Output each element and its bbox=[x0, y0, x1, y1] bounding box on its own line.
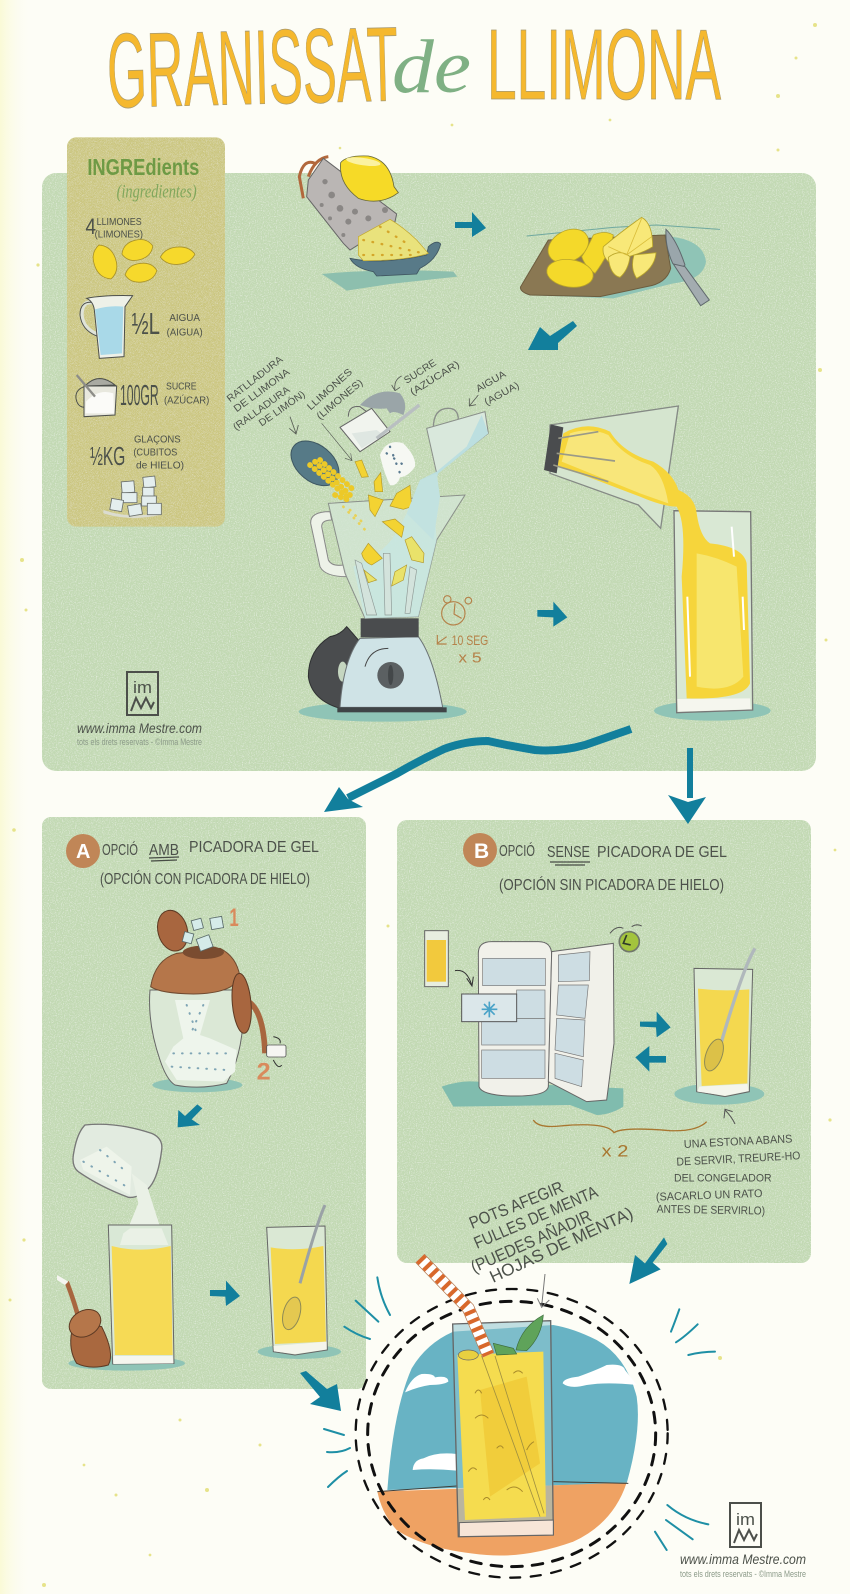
ingredient: water label: (AIGUA) bbox=[167, 328, 203, 339]
blender labels: DE LIMÓN) bbox=[256, 388, 308, 429]
ingredient: water label: ½L bbox=[132, 307, 160, 341]
note: take out before serving bbox=[656, 1133, 801, 1218]
ingredient: ice label: GLAÇONS bbox=[134, 435, 181, 446]
blender labels: (AZÚCAR) bbox=[407, 358, 462, 398]
ingredients heading bbox=[87, 154, 199, 203]
title: GRANISSAT bbox=[106, 5, 399, 130]
option B heading: (OPCIÓN SIN PICADORA DE HIELO) bbox=[499, 875, 724, 894]
arrow: option B to final drink bbox=[629, 1237, 667, 1284]
label pointer arrows bbox=[289, 376, 478, 461]
ingredient: water label bbox=[132, 307, 203, 341]
icon: four lemons bbox=[89, 236, 196, 284]
ice crusher bbox=[150, 907, 286, 1087]
arrows: in and out of freezer bbox=[635, 1012, 671, 1072]
final drink scene bbox=[324, 1237, 715, 1578]
icon: snowflake bbox=[482, 1002, 497, 1017]
glass with spoon bbox=[674, 948, 764, 1105]
blender labels: (AGUA) bbox=[483, 380, 521, 408]
note: add mint leaves: (PUEDES AÑADIR bbox=[468, 1206, 594, 1277]
spoon with zest bbox=[282, 432, 368, 533]
blender labels: LLIMONES bbox=[305, 367, 355, 413]
logo: top panel signature bbox=[77, 672, 202, 747]
blender labels bbox=[225, 354, 521, 433]
step numbers: 1 bbox=[229, 905, 239, 932]
note: take out before serving: UNA ESTONA ABANS bbox=[684, 1133, 793, 1151]
power cord bbox=[308, 627, 358, 708]
ingredient: ice label: ½KG bbox=[90, 441, 125, 471]
step: pouring into glass bbox=[537, 406, 771, 721]
icon: alarm clock with time bbox=[437, 596, 488, 667]
title: de bbox=[392, 25, 471, 109]
option A illustration bbox=[57, 905, 341, 1371]
blender labels: (RALLADURA bbox=[231, 384, 293, 433]
ingredients heading: (ingredientes) bbox=[117, 182, 197, 203]
ingredient: sugar label: (AZÚCAR) bbox=[164, 394, 209, 407]
icon: ice cubes bbox=[103, 476, 161, 518]
ingredients heading: INGREdients bbox=[87, 154, 199, 180]
ingredient: ice label: de HIELO) bbox=[136, 461, 184, 472]
poured lemon juice bbox=[557, 426, 750, 698]
tall glass bbox=[674, 511, 753, 713]
crusher lid and crank bbox=[57, 1275, 111, 1367]
icon: sugar jar bbox=[76, 375, 117, 417]
option A heading: PICADORA DE GEL bbox=[189, 839, 319, 856]
open freezer bbox=[462, 942, 614, 1102]
logo: top panel signature: tots els drets reservats - ©Imma Mestre bbox=[77, 737, 202, 747]
cup pouring sugar bbox=[340, 392, 419, 485]
glass of lemon slush bbox=[453, 1321, 553, 1537]
option A heading: (OPCIÓN CON PICADORA DE HIELO) bbox=[100, 869, 310, 888]
blender handle bbox=[311, 512, 347, 577]
ingredient: water label: AIGUA bbox=[169, 313, 200, 324]
ingredient: sugar label: SUCRE bbox=[166, 381, 197, 392]
jug pouring water bbox=[407, 408, 488, 540]
blender labels: SUCRE bbox=[402, 357, 439, 387]
brace with repeat count: x 2 bbox=[602, 1142, 628, 1161]
jug lid bbox=[544, 424, 563, 473]
ingredient: lemons label bbox=[85, 214, 143, 241]
blender motor base bbox=[337, 618, 447, 712]
note: take out before serving: ANTES DE SERVIRLO) bbox=[657, 1204, 765, 1218]
icon: water jug bbox=[80, 296, 133, 358]
blender labels: RATLLADURA bbox=[225, 354, 285, 405]
lemon pieces bbox=[355, 460, 424, 586]
ingredient: ice label: (CUBITOS bbox=[133, 447, 177, 458]
step numbers bbox=[229, 905, 271, 1085]
note: take out before serving: (SACARLO UN RATO bbox=[656, 1188, 763, 1204]
tilted blender jug bbox=[550, 406, 678, 528]
logo: top panel signature: im bbox=[133, 678, 152, 697]
ingredient: sugar label: 100GR bbox=[120, 380, 159, 412]
ingredient: lemons label: LLIMONES bbox=[97, 217, 142, 228]
sparkle rays bbox=[324, 1277, 715, 1550]
arrow: blender to glass bbox=[537, 602, 567, 627]
blender jug bbox=[328, 495, 465, 618]
arrow: ice to stir bbox=[210, 1281, 240, 1306]
panel: ingredients bbox=[67, 137, 225, 527]
arrow: straight to option B bbox=[668, 748, 706, 824]
arrow: note pointer to mint bbox=[537, 1274, 549, 1307]
arrow: board to blender bbox=[528, 321, 577, 350]
panel: option A bbox=[42, 817, 366, 1389]
option B heading: OPCIÓ bbox=[499, 841, 535, 860]
blender labels: DE LLIMONA bbox=[232, 367, 292, 415]
icon: alarm clock with time: 10 SEG bbox=[452, 632, 488, 648]
striped straw bbox=[420, 1258, 488, 1355]
step: blender with ingredients bbox=[225, 354, 521, 722]
option B illustration bbox=[425, 925, 801, 1218]
glass base bbox=[677, 698, 751, 712]
sky circle bbox=[387, 1325, 638, 1490]
mint leaves bbox=[493, 1315, 543, 1355]
ground bbox=[377, 1483, 627, 1556]
logo: bottom signature bbox=[680, 1503, 806, 1579]
option B heading: PICADORA DE GEL bbox=[597, 844, 727, 861]
tilted glass with crushed ice bbox=[73, 1124, 162, 1227]
arrow: crusher to glass bbox=[178, 1104, 202, 1127]
option A heading: AMB bbox=[149, 842, 179, 859]
option B heading bbox=[463, 833, 727, 894]
icon: green alarm clock bbox=[610, 925, 642, 952]
option A heading: A bbox=[76, 841, 90, 863]
blender labels: AIGUA bbox=[474, 369, 508, 395]
arrow: wavy to option A bbox=[324, 729, 631, 812]
step numbers: 2 bbox=[257, 1058, 271, 1085]
ingredient: ice label bbox=[90, 435, 184, 472]
note: add mint leaves bbox=[466, 1178, 636, 1287]
option A heading: OPCIÓ bbox=[102, 840, 138, 859]
logo: bottom signature: www.imma Mestre.com bbox=[680, 1551, 806, 1567]
logo: top panel signature: www.imma Mestre.com bbox=[77, 720, 202, 736]
note: take out before serving: DEL CONGELADOR bbox=[674, 1173, 772, 1185]
note: add mint leaves: POTS AFEGIR bbox=[466, 1178, 566, 1233]
note: add mint leaves: HOJAS DE MENTA) bbox=[487, 1203, 636, 1287]
arrow: grater to board bbox=[455, 212, 486, 237]
panel: option B bbox=[397, 820, 811, 1263]
dashed rings bbox=[356, 1289, 668, 1578]
clouds bbox=[405, 1365, 637, 1471]
panel: main preparation bbox=[42, 173, 816, 771]
ingredient: lemons label: (LIMONES) bbox=[95, 230, 143, 241]
note: take out before serving: DE SERVIR, TREURE-HO bbox=[676, 1150, 801, 1169]
blender labels: (LIMONES) bbox=[315, 377, 365, 422]
step: lemon grating bbox=[299, 156, 457, 291]
step: lemons on cutting board bbox=[521, 217, 720, 306]
stirred glass bbox=[258, 1205, 341, 1359]
icon: alarm clock with time: x 5 bbox=[458, 651, 482, 667]
logo: bottom signature: tots els drets reservats - ©Imma Mestre bbox=[680, 1569, 806, 1579]
brace with repeat count bbox=[533, 1120, 707, 1161]
option B heading: SENSE bbox=[547, 844, 590, 861]
option B heading: B bbox=[474, 840, 489, 863]
option A heading bbox=[66, 834, 319, 888]
logo: bottom signature: im bbox=[736, 1510, 755, 1529]
note: add mint leaves: FULLES DE MENTA bbox=[471, 1182, 601, 1253]
arrow: option A to final drink bbox=[300, 1371, 341, 1411]
small glass of juice bbox=[425, 931, 473, 987]
arrow: note pointer bbox=[724, 1109, 735, 1124]
ingredient: lemons label: 4 bbox=[85, 214, 96, 239]
glass with juice bbox=[68, 1225, 185, 1371]
